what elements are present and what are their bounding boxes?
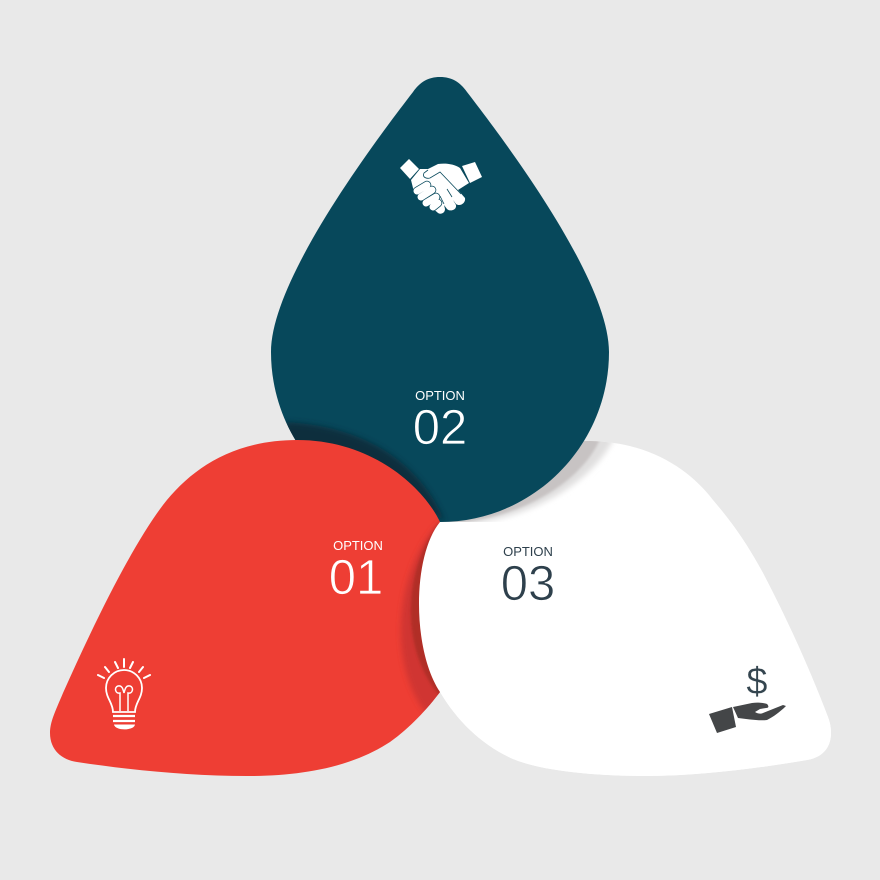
label: option 03: OPTION (503, 544, 553, 559)
label: option 01: OPTION (333, 538, 383, 553)
icon: handshake (400, 159, 482, 214)
label: option 01: 01 (329, 551, 383, 605)
panel: option 03 base (419, 441, 831, 776)
label: option 02: 02 (413, 401, 467, 455)
shadow: white on red (399, 521, 440, 713)
shadow: red on navy (285, 422, 445, 522)
shadow: navy on white (443, 441, 614, 522)
panel: option 02 (271, 77, 609, 522)
icon: hand with dollar: $ (746, 661, 768, 703)
label: option 02: OPTION (415, 388, 465, 403)
panel: option 03 overlap (419, 522, 491, 692)
icon: light bulb (98, 659, 150, 729)
infographic (50, 77, 831, 776)
panel: option 01 (50, 440, 440, 776)
label: option 03: 03 (501, 557, 555, 611)
icon: hand with dollar (709, 661, 786, 733)
